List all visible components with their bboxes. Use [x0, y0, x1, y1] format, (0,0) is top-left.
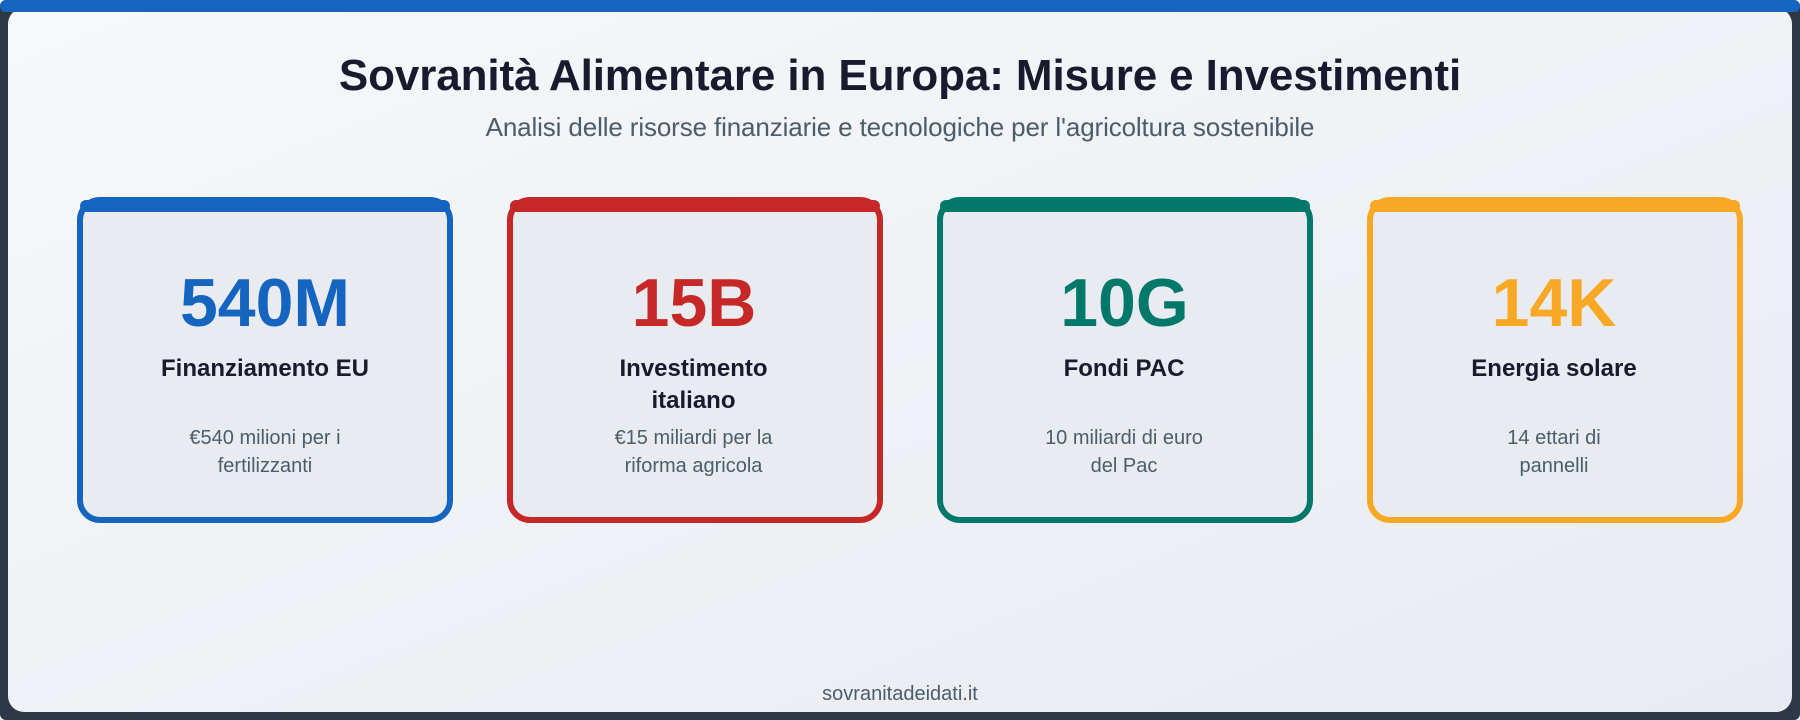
card: Finanziamento EU [77, 197, 453, 523]
description [1507, 427, 1601, 477]
description: 14 ettari di [1507, 427, 1601, 449]
label: Energia solare [1471, 355, 1637, 382]
card top bar [510, 200, 880, 212]
label: Investimento [619, 355, 768, 382]
card: Fondi PAC [937, 197, 1313, 523]
card top bar [940, 200, 1310, 212]
card top bar [1370, 200, 1740, 212]
card top bar [80, 200, 450, 212]
value: 15B [632, 265, 756, 341]
description: €15 miliardi per la [615, 427, 772, 449]
description [1045, 427, 1203, 477]
description [614, 427, 772, 477]
value: 14K [1492, 265, 1616, 341]
description: €540 milioni per i [189, 427, 341, 449]
value: 10G [1060, 265, 1189, 341]
footer: sovranitadeidati.it [822, 683, 978, 705]
label: italiano [651, 387, 736, 414]
description: riforma agricola [625, 455, 762, 477]
label [619, 355, 768, 414]
card: Energia solare [1367, 197, 1743, 523]
top accent bar [0, 0, 1800, 12]
subtitle: Analisi delle risorse finanziarie e tecnologiche per l'agricoltura sostenibile [486, 112, 1314, 142]
description [189, 427, 341, 477]
description: 10 miliardi di euro [1045, 427, 1203, 449]
description: fertilizzanti [218, 455, 312, 477]
card: Investimento italiano [507, 197, 883, 523]
title: Sovranità Alimentare in Europa: Misure e Investimenti [339, 51, 1461, 100]
label: Fondi PAC [1064, 355, 1184, 382]
description: pannelli [1520, 455, 1588, 477]
label: Finanziamento EU [161, 355, 369, 382]
value: 540M [180, 265, 350, 341]
description: del Pac [1091, 455, 1157, 477]
